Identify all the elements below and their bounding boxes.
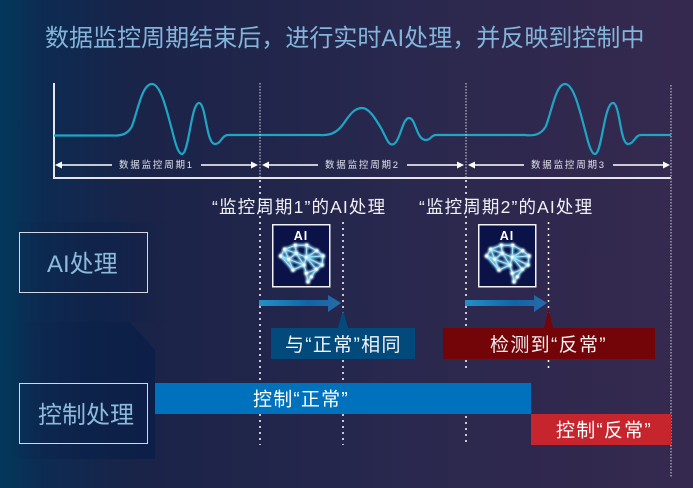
period 2 label with arrows (262, 159, 464, 171)
bar: control normal (155, 383, 531, 414)
title: 数据监控周期结束后，进行实时AI处理，并反映到控制中 (45, 18, 644, 53)
panel: control processing label: 控制处理 (38, 402, 134, 429)
bar: control normal: 控制“正常” (253, 388, 349, 410)
callout: anomaly detected (443, 309, 655, 359)
icon: AI brain 1 (273, 225, 330, 287)
bar: control anomaly (531, 414, 671, 445)
icon: AI brain 2 (479, 225, 536, 287)
callout: same as normal: 与“正常”相同 (285, 334, 402, 356)
chart axes (54, 83, 671, 178)
arrow: AI processing period 1 (259, 295, 341, 312)
heading: AI processing of period 2: “监控周期2”的AI处理 (419, 197, 593, 217)
period 1 label with arrows (55, 159, 258, 171)
period 1 label with arrows: 数据监控周期1 (119, 159, 194, 171)
callout: same as normal (271, 310, 415, 359)
period 2 label with arrows: 数据监控周期2 (325, 159, 400, 171)
period 3 label with arrows: 数据监控周期3 (531, 159, 606, 171)
chart: monitoring waveform (54, 83, 671, 178)
icon: AI brain 2: AI (500, 229, 514, 243)
panel: control processing label (20, 384, 148, 444)
bar: control anomaly: 控制“反常” (556, 420, 652, 442)
arrow: AI processing period 2 (465, 295, 547, 312)
waveform line (54, 84, 671, 154)
period 3 label with arrows (468, 159, 670, 171)
icon: AI brain 1: AI (294, 229, 308, 243)
panel: AI processing label: AI处理 (47, 251, 118, 278)
callout: anomaly detected: 检测到“反常” (490, 334, 607, 356)
heading: AI processing of period 1: “监控周期1”的AI处理 (212, 197, 386, 217)
panel: AI processing label (20, 232, 148, 292)
